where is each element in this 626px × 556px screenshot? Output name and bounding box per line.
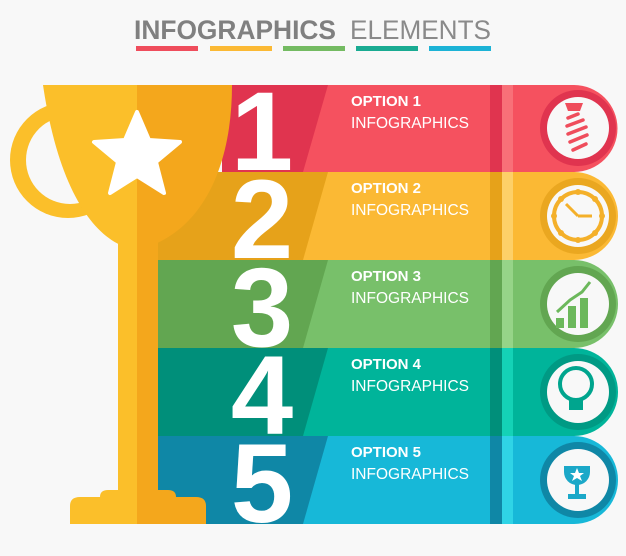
icon: trophy [540,442,616,518]
row 3 option 3: INFOGRAPHICS [351,290,469,307]
row 2 option 2: INFOGRAPHICS [351,202,469,219]
row 2 option 2: OPTION 2 [351,180,421,197]
title [134,15,491,51]
big numbers: 4 [231,333,293,458]
big numbers: 1 [231,69,293,194]
row 3 option 3: OPTION 3 [351,268,421,285]
row 5 option 5: INFOGRAPHICS [351,466,469,483]
row 5 option 5: OPTION 5 [351,444,421,461]
title: INFOGRAPHICS [134,15,336,45]
icon: growth chart [540,266,616,342]
icon: star [94,112,180,193]
row 2 option 2 [158,172,618,260]
row 1 option 1: OPTION 1 [351,93,421,110]
row 1 option 1 [222,85,617,172]
row 5 option 5 [158,436,618,524]
row 4 option 4 [158,348,618,436]
icon: light bulb [540,354,616,430]
row 4 option 4: OPTION 4 [351,356,422,373]
big numbers [231,69,293,546]
title: ELEMENTS [350,15,491,45]
big numbers: 2 [231,157,293,282]
icon: tie [540,90,616,166]
row 4 option 4: INFOGRAPHICS [351,378,469,395]
row 1 option 1: INFOGRAPHICS [351,115,469,132]
big numbers: 5 [231,421,293,546]
trophy [10,85,232,524]
row 3 option 3 [158,260,618,348]
icon: clock [540,178,616,254]
big numbers: 3 [231,245,293,370]
